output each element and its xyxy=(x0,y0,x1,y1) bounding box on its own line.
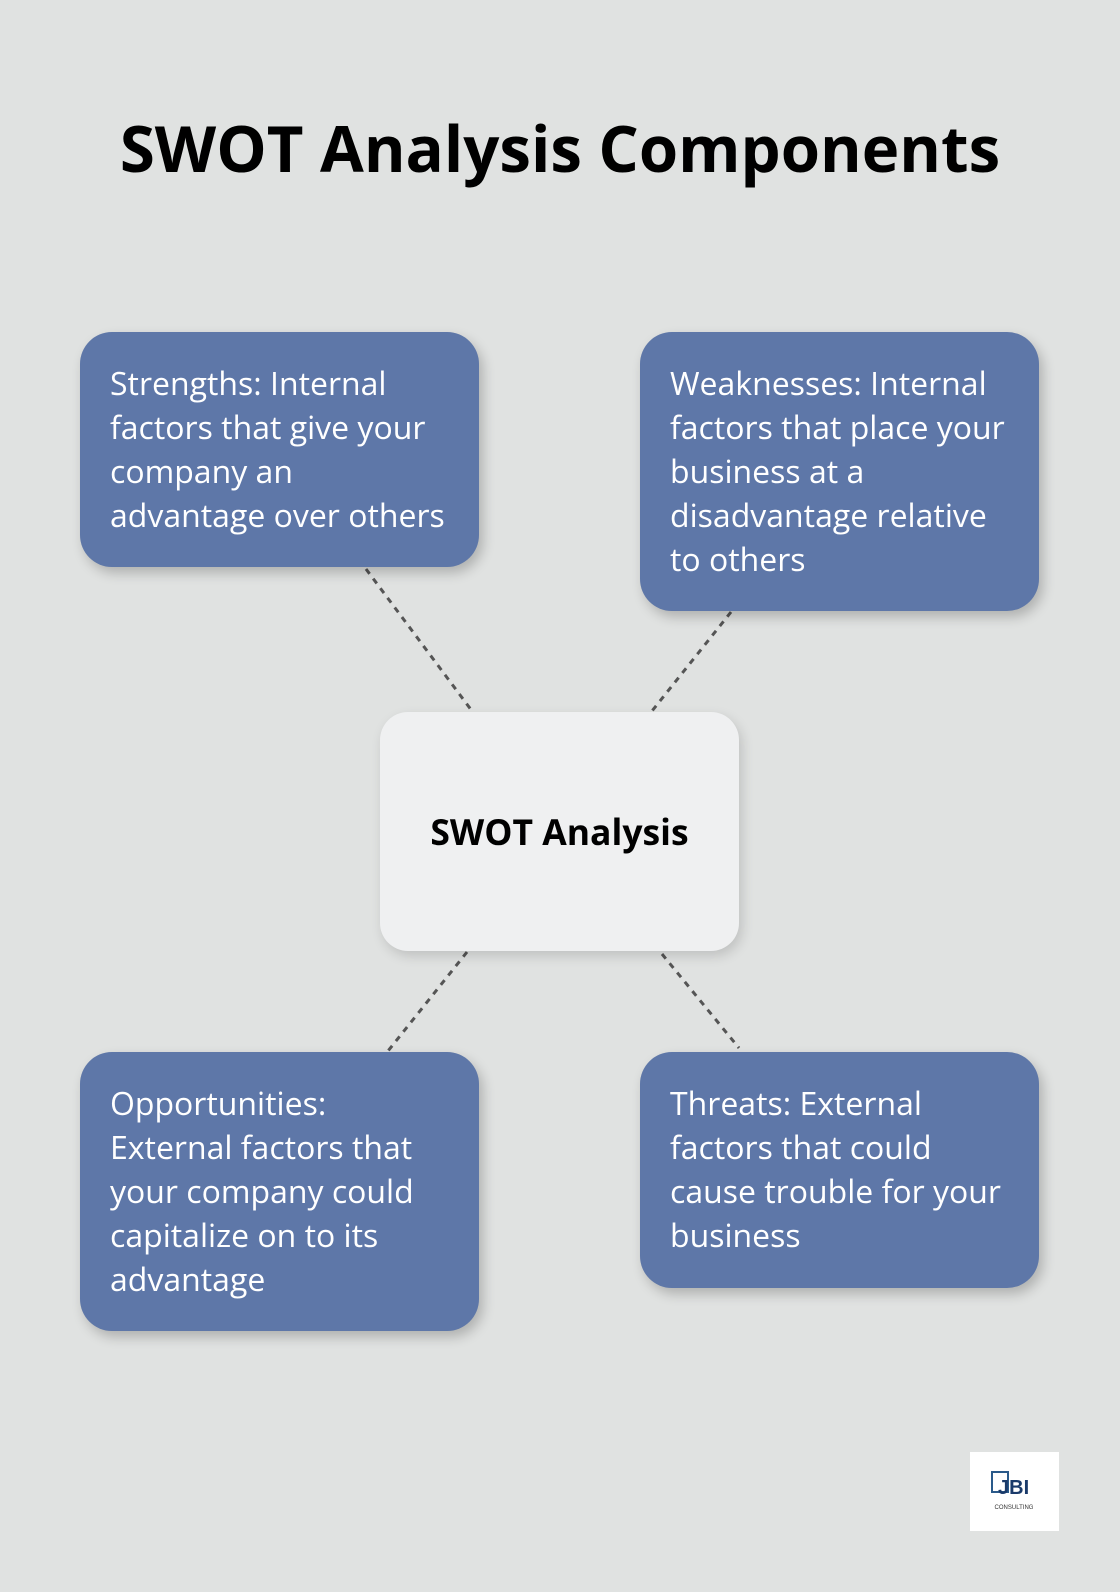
panel: threats xyxy=(640,1052,1039,1288)
panel: strengths xyxy=(80,332,479,567)
center node xyxy=(380,712,739,951)
panel: opportunities: Opportunities: External factors that your company could capitalize on to its advantage xyxy=(110,1082,414,1301)
logo: CONSULTING xyxy=(995,1505,1034,1511)
panel: weaknesses xyxy=(640,332,1039,611)
panel: opportunities xyxy=(80,1052,479,1331)
logo: JBI xyxy=(998,1477,1029,1499)
panel: threats: Threats: External factors that could cause trouble for your business xyxy=(670,1082,1001,1257)
panel: strengths: Strengths: Internal factors that give your company an advantage over others xyxy=(110,362,445,537)
center node: SWOT Analysis xyxy=(430,808,689,856)
logo xyxy=(970,1452,1059,1531)
title: SWOT Analysis Components xyxy=(120,104,1000,191)
panel: weaknesses: Weaknesses: Internal factors that place your business at a disadvantage relative to others xyxy=(670,362,1005,581)
